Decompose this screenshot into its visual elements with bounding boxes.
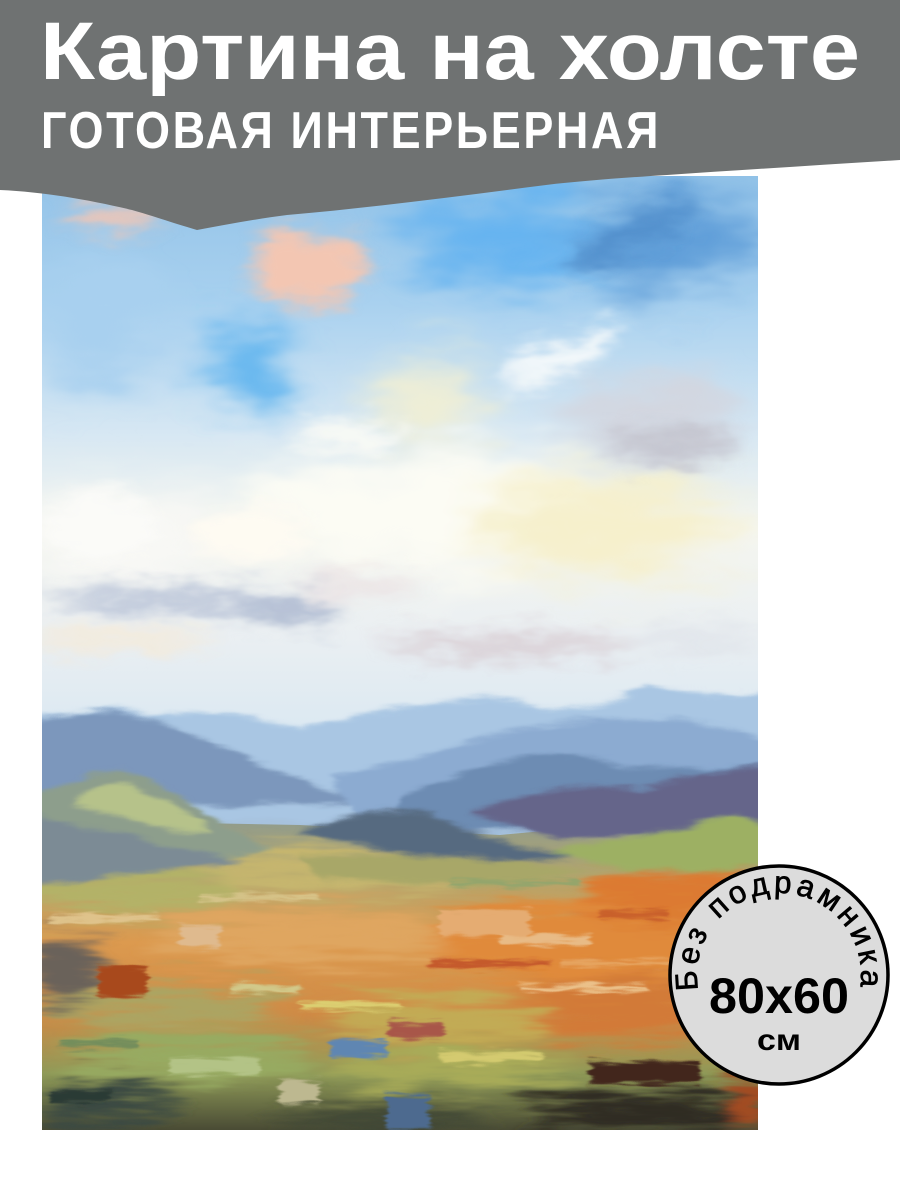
banner: grey header (0, 0, 900, 230)
sky (42, 176, 758, 730)
subtitle: ГОТОВАЯ ИНТЕРЬЕРНАЯ (41, 102, 661, 160)
land base (42, 824, 758, 1130)
title: Картина на холсте (40, 6, 860, 97)
badge unit: см (757, 1024, 801, 1057)
mid mountains (30, 766, 770, 885)
brush strokes (50, 880, 700, 1130)
fields (0, 848, 780, 1136)
painting: landscape on canvas (0, 176, 780, 1140)
badge: size 80x60 cm, no stretcher (668, 864, 890, 1086)
badge arc text: Без подрамника (675, 876, 878, 990)
far mountains (42, 683, 758, 835)
badge size: 80x60 (709, 968, 849, 1024)
